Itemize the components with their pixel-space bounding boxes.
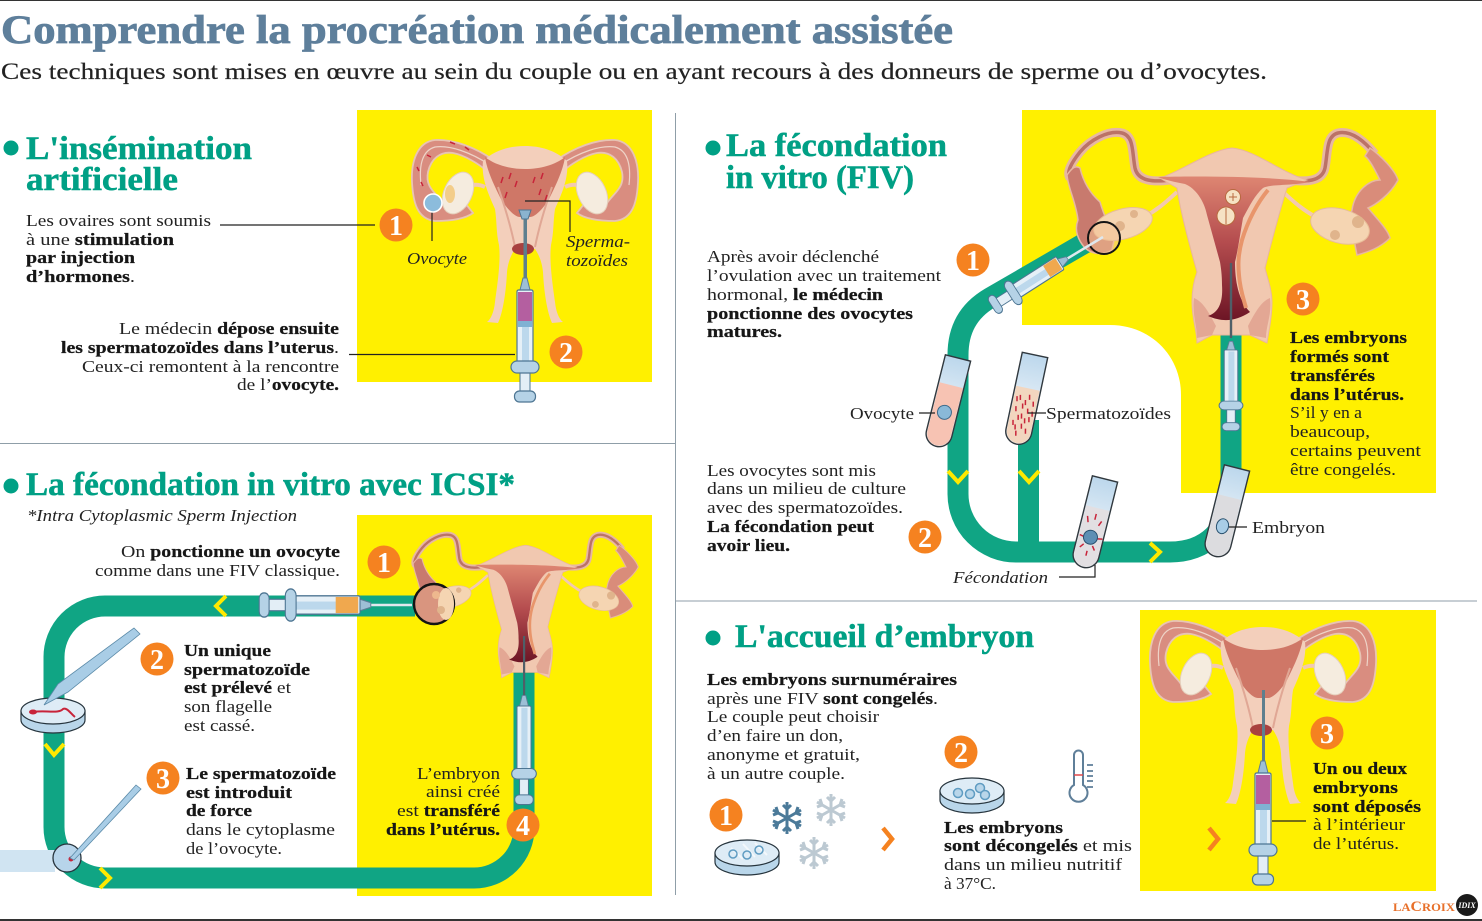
text: step 1: comme dans une FIV classique. (95, 561, 340, 580)
number 3: 3 (1296, 285, 1310, 316)
text: transfert: Les embryons (1290, 328, 1407, 347)
number 3 (1286, 282, 1320, 316)
injection pipette (70, 785, 141, 860)
text: stimulation: à une stimulation (26, 230, 175, 249)
text: milieu de culture: dans un milieu de culture (707, 479, 906, 498)
text: step 2: son flagelle (184, 697, 272, 716)
text: step 3: sont déposés (1313, 797, 1421, 816)
panel: fécondation in vitro (FIV) (706, 110, 1436, 587)
icon: ovocyte (424, 194, 442, 212)
text: intro: d’en faire un don, (707, 726, 843, 745)
subtitle: Ces techniques sont mises en œuvre au sein du couple ou en ayant recours à des donneurs de sperme ou d’ovocytes. (1, 59, 1267, 85)
text: step 3 (186, 764, 337, 858)
illustration: uterus (1150, 621, 1376, 804)
panel: accueil d'embryon (706, 610, 1436, 893)
needle and syringe (1249, 690, 1277, 885)
text: stimulation: d’hormones . (26, 267, 135, 286)
text: ovulation: l’ovulation avec un traitement (707, 266, 941, 285)
illustration: uterus (412, 140, 638, 323)
illustration: uterus (413, 535, 638, 678)
number 2: 2 (954, 738, 968, 769)
number 1: 1 (377, 548, 391, 579)
label: Ovocyte: Ovocyte (407, 249, 467, 268)
text: step 2: est prélevé et (184, 678, 291, 697)
text: step 4: dans l’utérus. (386, 820, 500, 839)
text: ovulation: Après avoir déclenché (707, 247, 879, 266)
text: ovulation: hormonal, le médecin (707, 285, 884, 304)
number 2: 2 (559, 338, 573, 369)
pipette: sperm collection (44, 628, 140, 705)
number 1 (368, 546, 400, 579)
tube: fécondation (1070, 476, 1118, 570)
text: transfert (1290, 328, 1421, 479)
text: milieu de culture: Les ovocytes sont mis (707, 461, 876, 480)
text: milieu de culture (707, 461, 906, 555)
number 3 (1310, 716, 1344, 750)
text: ovulation (707, 247, 941, 341)
syringe (511, 278, 539, 402)
text: ovulation: matures. (707, 322, 782, 341)
text: step 4: ainsi créé (426, 782, 500, 801)
text: dépose: les spermatozoïdes dans l’uterus . (61, 338, 339, 357)
title: Comprendre la procréation médicalement assistée (1, 7, 953, 52)
heading: La fécondation (726, 128, 947, 164)
number 3 (146, 762, 180, 795)
text: milieu de culture: avec des spermatozoïdes. (707, 498, 903, 517)
needle (519, 210, 531, 282)
text: step 2: Un unique (184, 641, 272, 660)
snowflake grey 1 (817, 794, 845, 826)
yellow background (357, 515, 652, 896)
text: stimulation: Les ovaires sont soumis (26, 211, 211, 230)
retrieval syringe (259, 589, 412, 621)
number 2 (908, 520, 942, 554)
text: step 2: spermatozoïde (184, 660, 311, 679)
ovocyte (53, 844, 81, 872)
number 1 (710, 798, 742, 832)
yellow background (1140, 610, 1436, 891)
text: step 4: L’embryon (417, 764, 501, 783)
text: transfert: beaucoup, (1290, 422, 1370, 441)
text: transfert: S’il y en a (1290, 403, 1362, 422)
label: Spermatozoïdes: tozoïdes (566, 251, 628, 270)
number 2 (550, 336, 582, 369)
arrow chevron 2 (1209, 828, 1218, 850)
number 1: 1 (966, 246, 980, 277)
text: step 2 (944, 818, 1132, 893)
number 1: 1 (389, 211, 403, 242)
label: Spermatozoïdes: Spermatozoïdes (1046, 404, 1171, 423)
heading: in vitro (FIV) (726, 160, 914, 196)
text: step 3: de l’ovocyte. (186, 839, 282, 858)
heading: La fécondation in vitro avec ICSI* (26, 467, 515, 503)
text: step 2: est cassé. (184, 716, 255, 735)
tube: embryon (1202, 465, 1250, 559)
number 4: 4 (516, 811, 530, 842)
text: step 4 (386, 764, 501, 839)
text: stimulation (26, 211, 211, 286)
arrow chevrons (948, 471, 1160, 562)
number 3: 3 (156, 764, 170, 795)
icon: thermometer (1069, 751, 1093, 802)
yellow background (1022, 110, 1436, 493)
text: step 3: de force (186, 801, 253, 820)
tube: ovocyte (923, 355, 971, 449)
transfer syringe (512, 636, 536, 805)
text: stimulation: par injection (26, 248, 136, 267)
label: Spermatozoïdes (566, 232, 630, 270)
flow track (54, 606, 524, 878)
label: Ovocyte: Ovocyte (850, 404, 914, 423)
panel: insémination artificielle (4, 110, 652, 402)
heading (706, 128, 947, 196)
text: milieu de culture: avoir lieu. (707, 536, 790, 555)
retrieval syringe (985, 237, 1103, 318)
text: transfert: dans l’utérus. (1290, 385, 1404, 404)
dish with thawed embryos (940, 778, 1004, 813)
number 1: 1 (719, 801, 733, 832)
text: transfert: être congelés. (1290, 460, 1396, 479)
text: step 2: à 37°C. (944, 874, 996, 893)
number 2: 2 (918, 523, 932, 554)
dish with frozen embryos (715, 840, 779, 875)
text: step 1 (95, 542, 341, 580)
label: Spermatozoïdes: Sperma- (566, 232, 630, 251)
heading: L'accueil d’embryon (735, 619, 1034, 655)
text: transfert: certains peuvent (1290, 441, 1421, 460)
text: step 1: On ponctionne un ovocyte (121, 542, 341, 561)
text: intro: après une FIV sont congelés . (707, 689, 938, 708)
heading: L'insémination (26, 131, 252, 167)
ovocyte retrieval circle (414, 584, 454, 624)
label: Embryon: Embryon (1252, 518, 1326, 537)
text: transfert: formés sont (1290, 347, 1389, 366)
text: step 2: Les embryons (944, 818, 1063, 837)
text: step 3: de l’utérus. (1313, 834, 1399, 853)
text: milieu de culture: La fécondation peut (707, 517, 874, 536)
text: dépose (61, 319, 340, 394)
illustration: uterus (1067, 132, 1398, 343)
arrow chevrons (45, 596, 226, 888)
ovocyte retrieval circle (1088, 222, 1120, 254)
heading: artificielle (26, 162, 178, 198)
text: intro (707, 670, 957, 783)
text: step 3: est introduit (186, 783, 292, 802)
label: Fécondation: Fécondation (952, 568, 1048, 587)
holding pipette (0, 850, 55, 872)
logo: La Croix IDIX (1393, 894, 1478, 916)
number 4 (506, 808, 540, 842)
yellow background (357, 110, 652, 382)
number 1 (380, 208, 412, 242)
text: dépose: de l’ovocyte. (237, 375, 339, 394)
text: step 3: Un ou deux (1313, 759, 1408, 778)
snowflake dark (773, 802, 801, 834)
text: step 3: embryons (1313, 778, 1398, 797)
text: intro: anonyme et gratuit, (707, 745, 860, 764)
text: intro: à un autre couple. (707, 764, 845, 783)
leader lines (220, 201, 570, 354)
text: step 3: dans le cytoplasme (186, 820, 335, 839)
text: step 4: est transféré (397, 801, 501, 820)
logo: La Croix IDIX: LACROIX (1393, 899, 1455, 915)
text: ovulation: ponctionne des ovocytes (707, 304, 913, 323)
snowflake grey 2 (800, 837, 828, 869)
text: step 2: sont décongelés et mis (944, 836, 1132, 855)
text: step 3: Le spermatozoïde (186, 764, 337, 783)
text: dépose: Ceux-ci remontent à la rencontre (82, 357, 339, 376)
text: step 2 (184, 641, 311, 735)
leader lines (919, 413, 1247, 577)
number 3: 3 (1320, 719, 1334, 750)
text: dépose: Le médecin dépose ensuite (119, 319, 340, 338)
panel: fécondation in vitro avec ICSI (0, 467, 652, 896)
text: step 2: dans un milieu nutritif (944, 855, 1122, 874)
number 1 (956, 244, 990, 277)
text: intro: Le couple peut choisir (707, 707, 879, 726)
tube: spermatozoïdes (1003, 352, 1048, 447)
transfer syringe (1219, 263, 1243, 431)
text: intro: Les embryons surnuméraires (707, 670, 957, 689)
heading (4, 131, 252, 198)
footnote: *Intra Cytoplasmic Sperm Injection (27, 506, 297, 525)
number 2 (944, 736, 978, 769)
logo: La Croix IDIX: IDIX (1457, 901, 1476, 910)
petri dish with spermatozoon (21, 698, 85, 733)
text: transfert: transférés (1290, 366, 1375, 385)
number 2: 2 (150, 645, 164, 676)
text: step 3 (1313, 759, 1421, 853)
text: step 3: à l’intérieur (1313, 815, 1405, 834)
flow track (958, 240, 1231, 552)
arrow chevron 1 (883, 828, 892, 850)
number 2 (140, 642, 174, 676)
